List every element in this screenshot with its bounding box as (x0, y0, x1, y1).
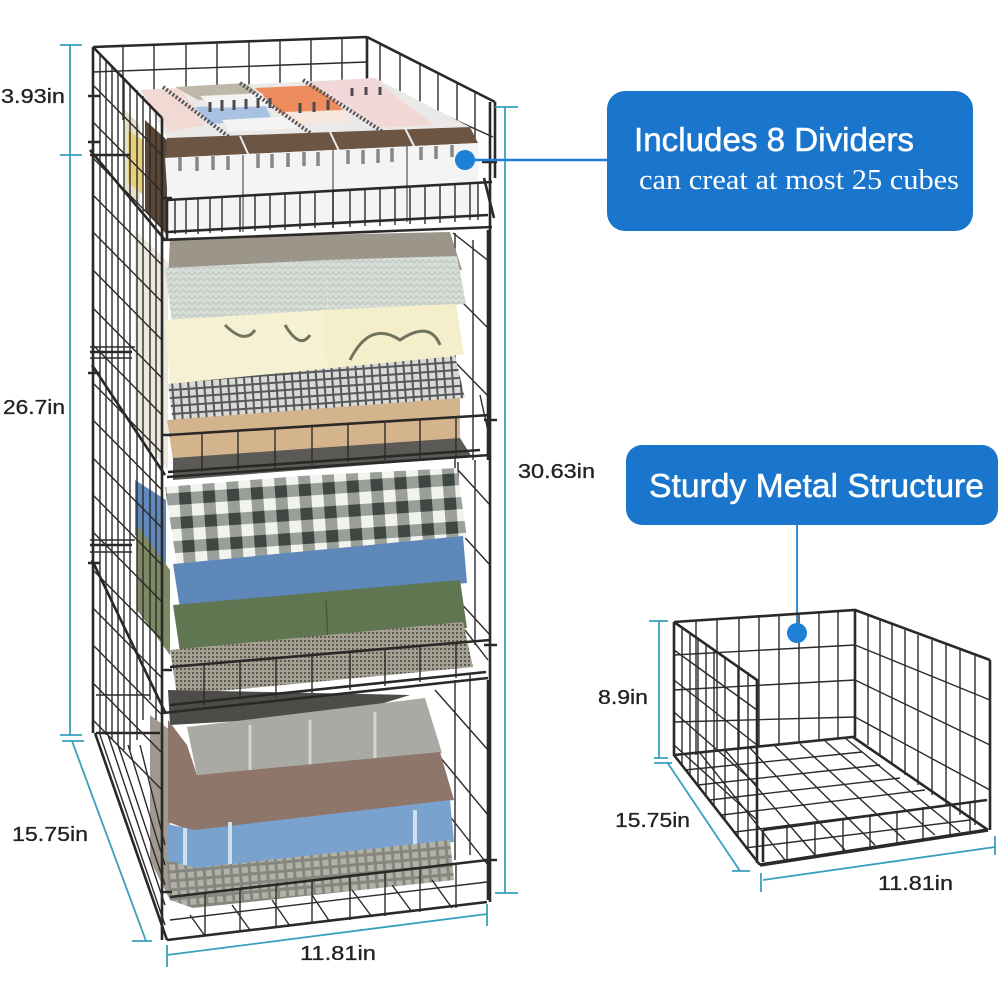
dimension: left depth 15.75in: 15.75in (12, 824, 88, 846)
tier 1: divider boxes with folded garments (125, 78, 478, 235)
dimension: 8.9in (598, 621, 668, 758)
dimension: bottom width 11.81in: 11.81in (300, 943, 376, 965)
tier 2: folded clothes (135, 230, 472, 480)
tier 3 front rails (163, 640, 490, 713)
callout box (626, 445, 998, 525)
callout heading: Includes 8 Dividers (634, 121, 914, 158)
connector (796, 525, 798, 630)
bottom left edge (95, 733, 167, 940)
callout: includes 8 dividers (455, 91, 973, 231)
front frame (760, 660, 990, 865)
front white dividers (165, 143, 478, 234)
dimension: right width 11.81in: 11.81in (878, 873, 953, 895)
dimension: 26.7in: 26.7in (3, 397, 65, 419)
dimension: 26.7in (3, 155, 82, 735)
tier 4 front rails (167, 860, 488, 940)
callout text: Sturdy Metal Structure (649, 467, 984, 504)
dimension: 8.9in: 8.9in (598, 687, 648, 709)
dimension: 3.93in: 3.93in (1, 86, 65, 108)
single basket illustration (674, 610, 990, 865)
floor grid (685, 752, 970, 848)
connector dot (787, 623, 807, 643)
tall organizer: front wires (88, 37, 497, 940)
callout: sturdy metal structure (626, 445, 998, 630)
dimension: total height 30.63in: 30.63in (518, 461, 595, 483)
left panel (682, 628, 748, 850)
connector clips (88, 96, 497, 892)
tier 4: folded clothes (150, 690, 454, 908)
tier 2 front rails (167, 415, 490, 477)
dimension: right depth 15.75in (615, 762, 750, 871)
dimension: total height 30.63in (495, 107, 595, 893)
back and right panels (674, 610, 990, 830)
dimension: right width 11.81in (761, 836, 995, 895)
front brown garment tops (165, 127, 478, 158)
notch marks (210, 87, 380, 113)
callout box (607, 91, 973, 231)
dimension: bottom width 11.81in (167, 904, 487, 967)
tier 1 front rails (163, 182, 492, 240)
tall organizer: back wires (93, 37, 493, 865)
left side panel wires (90, 54, 165, 790)
dimension: 3.93in (1, 45, 82, 155)
side of drawer contents (125, 110, 140, 205)
connector dot and line (455, 150, 608, 170)
dimension: left depth 15.75in (12, 741, 152, 941)
diagonal dividers (163, 80, 403, 147)
callout subtext: can creat at most 25 cubes (639, 165, 959, 196)
dimension: right depth 15.75in: 15.75in (615, 810, 690, 832)
tier 3: folded clothes (135, 468, 473, 695)
back divider boxes (140, 78, 470, 138)
